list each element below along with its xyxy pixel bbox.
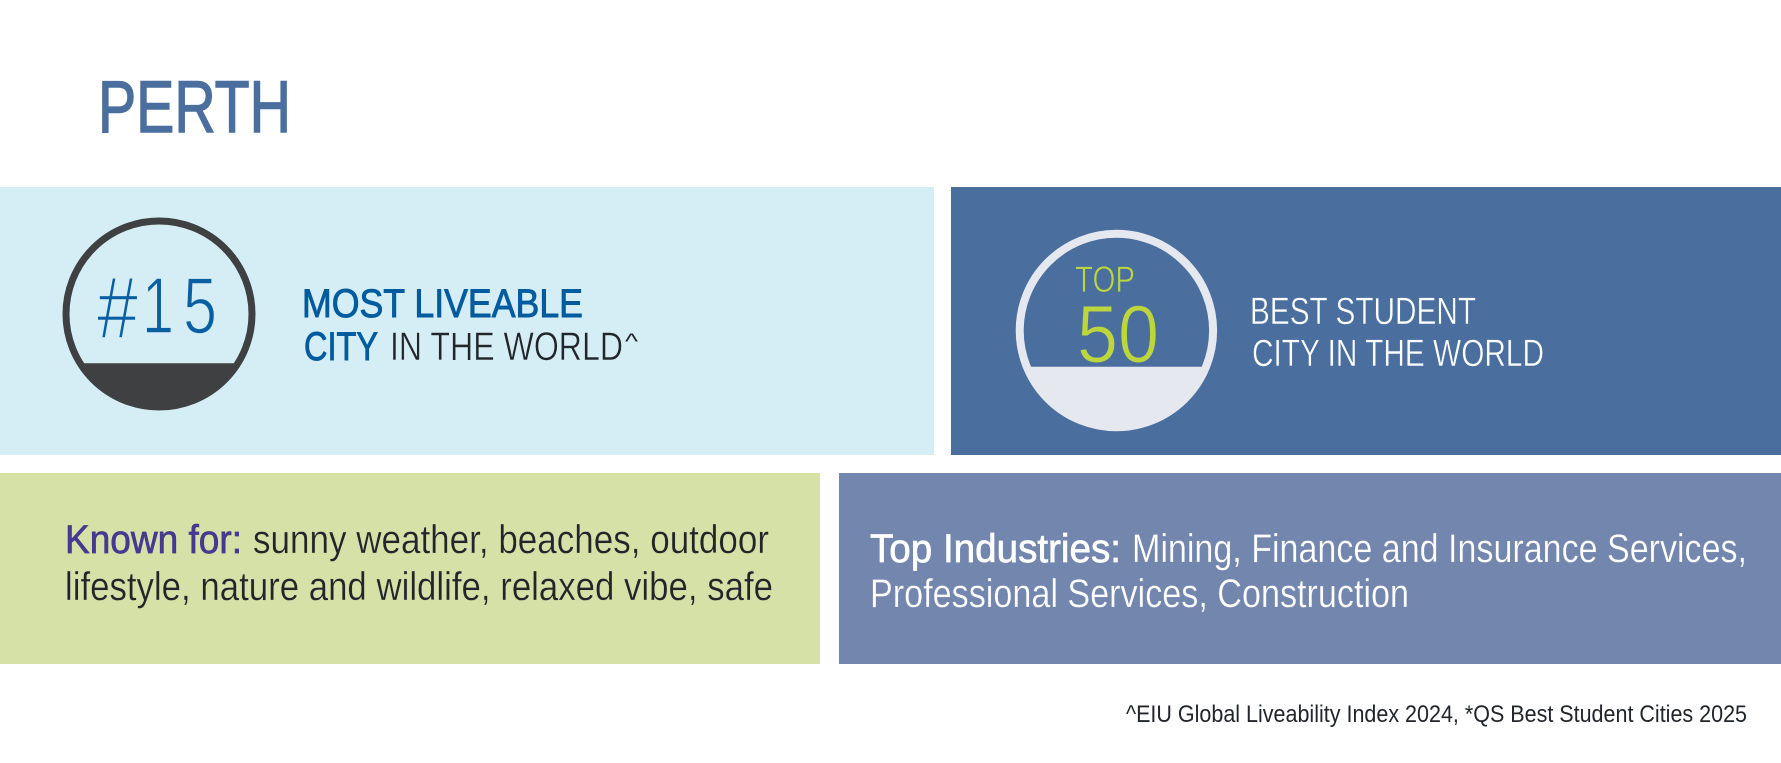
- known for text: sunny weather, beaches, outdoor: [253, 518, 769, 562]
- known for text: Known for:: [65, 518, 242, 562]
- rank number: 1: [142, 261, 174, 350]
- icon: #15 rank badge: [66, 221, 252, 407]
- title: PERTH: [98, 67, 291, 148]
- icon: top 50 rank badge: [1020, 234, 1213, 427]
- top label: TOP: [1075, 259, 1135, 300]
- top industries text: [870, 527, 1747, 616]
- heading: city in the world: [304, 325, 639, 369]
- heading: city in the world: CITY IN THE WORLD: [1252, 333, 1544, 375]
- panel: best student city: [951, 187, 1781, 455]
- rank number: #: [97, 258, 138, 357]
- heading: city in the world: ^: [625, 329, 639, 354]
- rank number: [97, 258, 217, 357]
- rank number: 5: [183, 261, 217, 350]
- panel: known for: [0, 473, 820, 664]
- top industries text: Top Industries:: [870, 527, 1121, 571]
- heading: best student: BEST STUDENT: [1250, 291, 1476, 333]
- heading: city in the world: CITY: [304, 325, 378, 369]
- panel: most liveable city: [0, 187, 934, 455]
- heading: city in the world: IN THE WORLD: [390, 325, 623, 369]
- panel: top industries: [839, 473, 1781, 664]
- known for text: [65, 518, 773, 609]
- known for text: lifestyle, nature and wildlife, relaxed vibe, safe: [65, 565, 773, 609]
- heading: most liveable: MOST LIVEABLE: [302, 282, 583, 326]
- rank number: 50: [1077, 289, 1159, 380]
- top industries text: Professional Services, Construction: [870, 572, 1409, 616]
